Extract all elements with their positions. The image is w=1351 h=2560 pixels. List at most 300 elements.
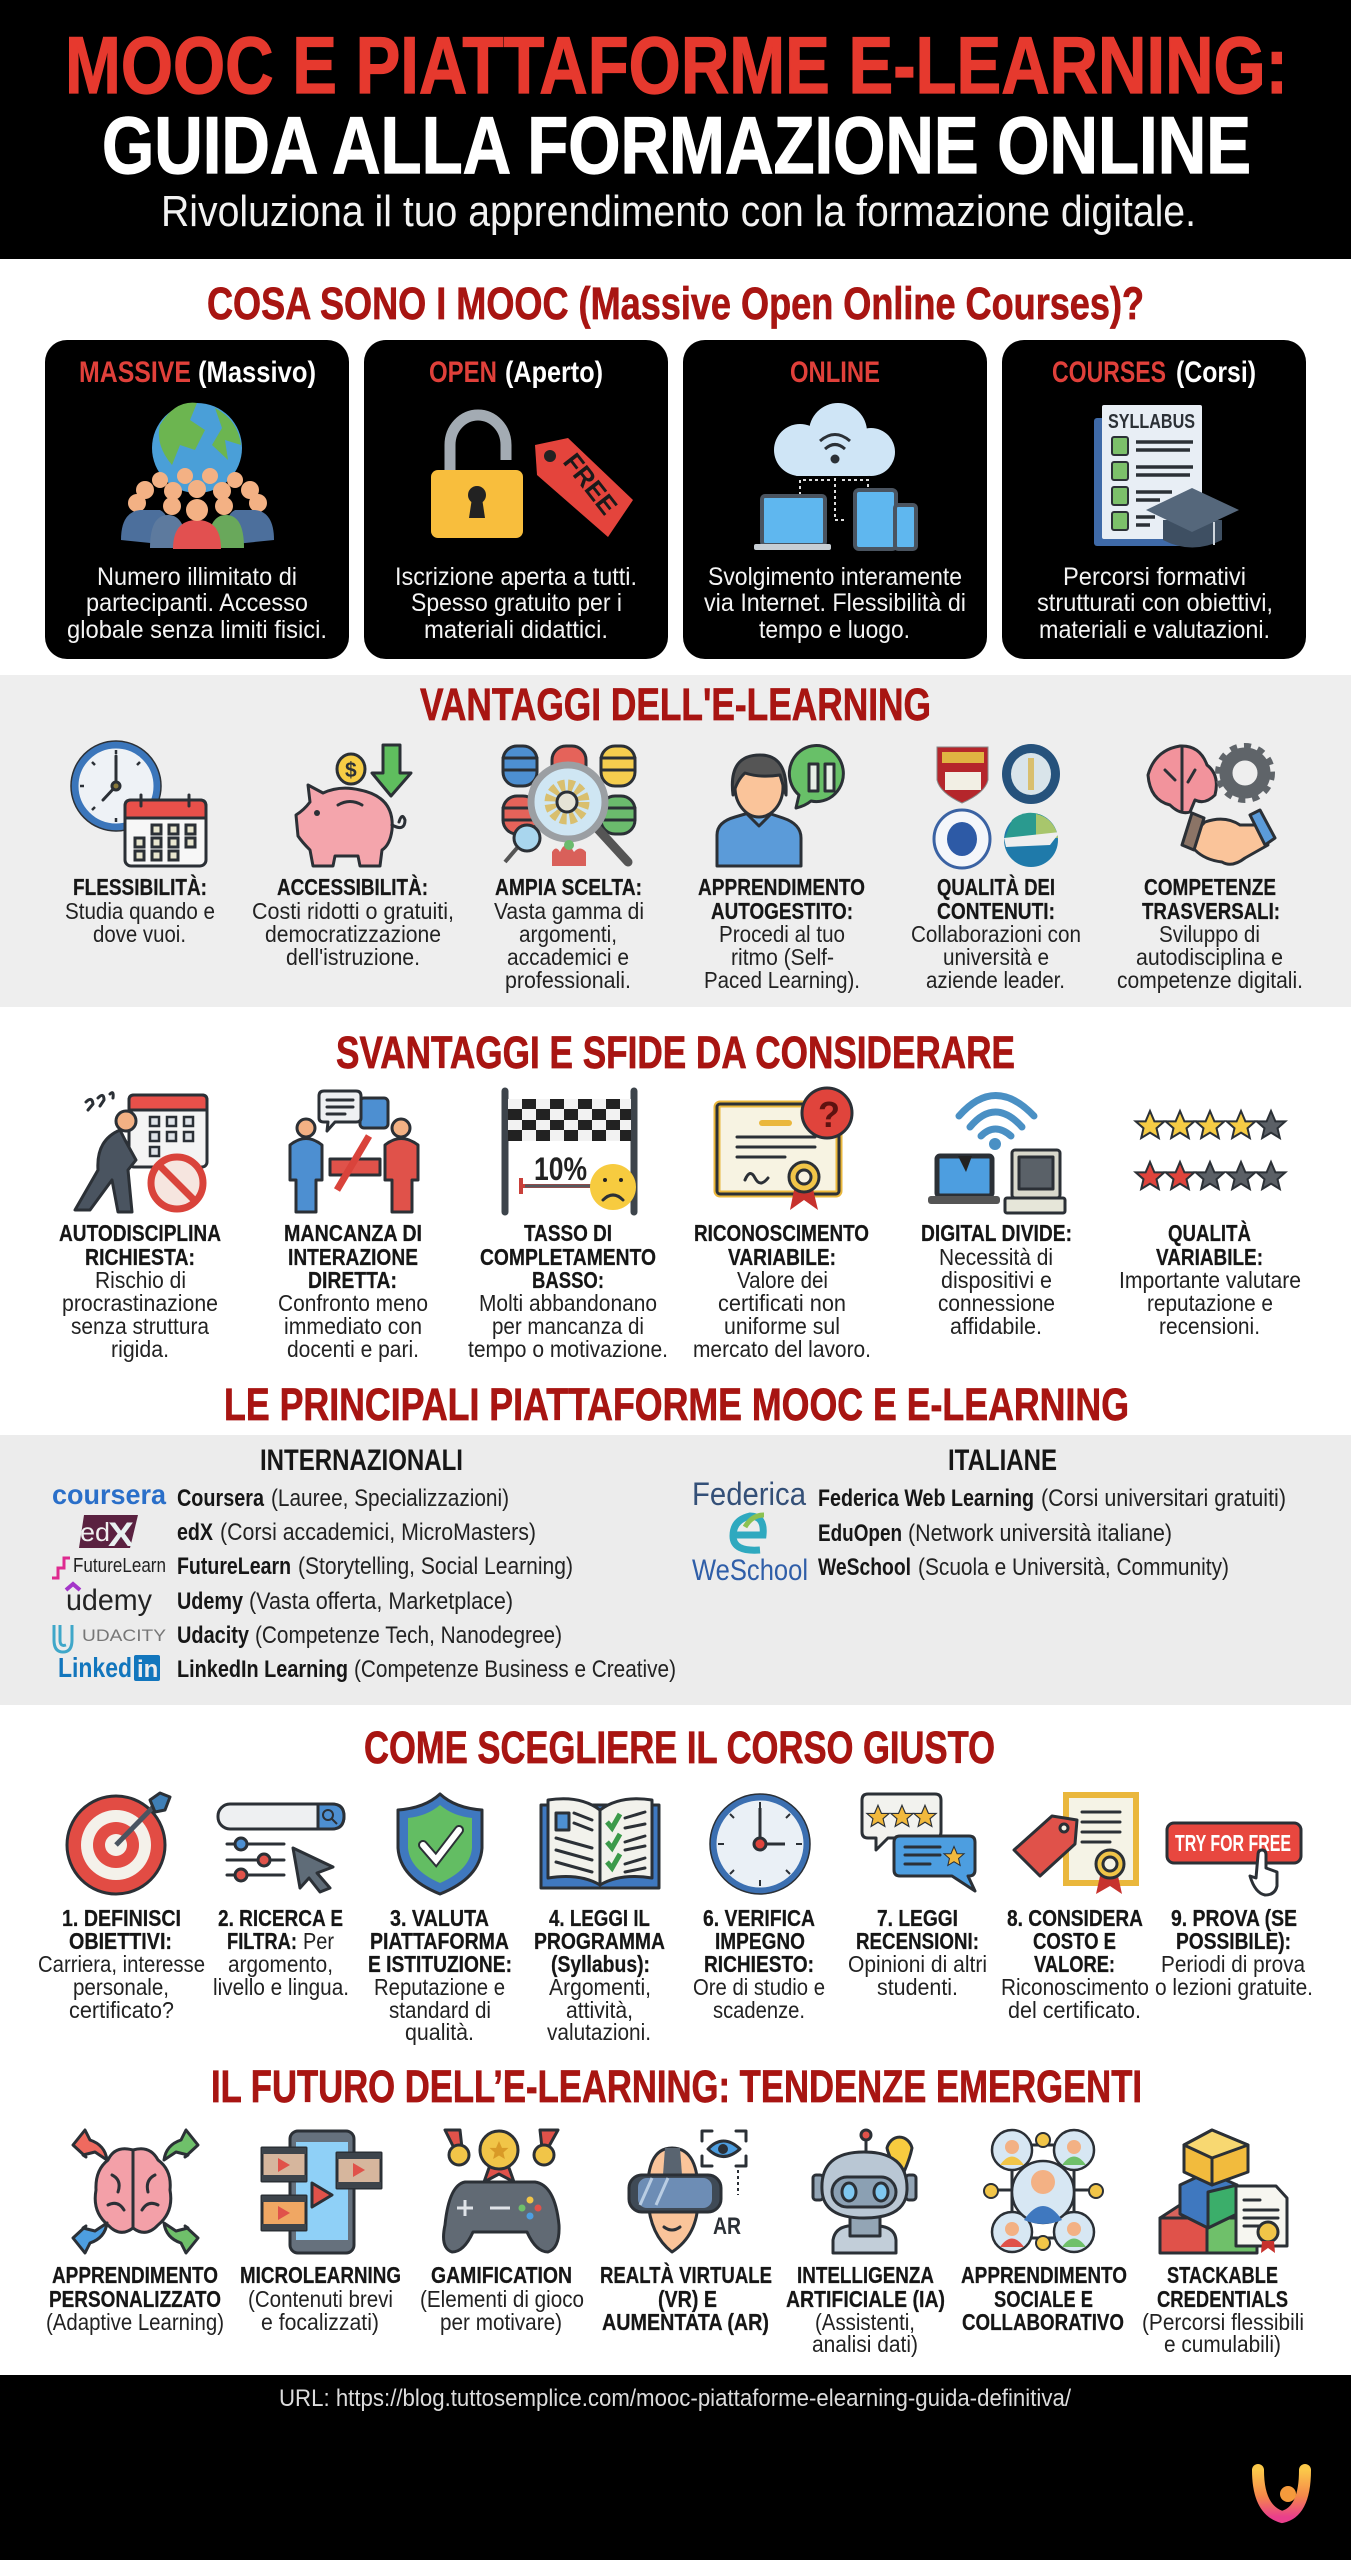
label: studenti. [877, 1974, 958, 2000]
item: personalizzato [46, 2130, 224, 2335]
text [395, 563, 637, 644]
label: MANCANZA DI [284, 1220, 422, 1246]
linkedin: (Competenze Business e Creative) [354, 1656, 676, 1683]
edX [79, 1515, 536, 1554]
label: PERSONALIZZATO [49, 2286, 221, 2312]
icon: stressed person, calendar, prohibition sign [75, 1093, 207, 1212]
udemy: Udemy [177, 1588, 244, 1615]
label: Periodi di prova [1161, 1951, 1305, 1977]
item: accessibilità [252, 745, 454, 970]
icon: broken wifi, laptop, old computer [928, 1096, 1065, 1213]
label [38, 1905, 205, 2023]
icon: shield check [398, 1794, 482, 1894]
icon: robot and lightbulb [813, 2130, 916, 2253]
label: COLLABORATIVO [962, 2309, 1124, 2335]
label: Procedi al tuo [719, 921, 845, 947]
label: STACKABLE [1167, 2262, 1278, 2288]
label: RECENSIONI: [856, 1928, 979, 1954]
icon: search bar and filters [218, 1804, 344, 1892]
item: microlearning [240, 2131, 401, 2335]
label [240, 2262, 401, 2335]
label [911, 873, 1081, 993]
label: APPRENDIMENTO [52, 2262, 218, 2288]
label [698, 874, 865, 993]
label: (Syllabus): [551, 1951, 650, 1977]
label: standard di [389, 1997, 491, 2023]
udemy [66, 1584, 513, 1617]
federica [692, 1476, 1286, 1512]
label: CREDENTIALS [1157, 2286, 1288, 2312]
icon: star ratings [1136, 1111, 1285, 1189]
label: o lezioni gratuite. [1155, 1974, 1313, 2000]
item: gamification [420, 2130, 584, 2335]
label: GAMIFICATION [431, 2262, 572, 2288]
text: Svolgimento interamente [708, 563, 962, 591]
item 8 [1155, 1823, 1313, 2000]
label: 6. VERIFICA [703, 1905, 815, 1931]
icon: people network [984, 2130, 1103, 2252]
panel: vantaggi [0, 675, 1351, 1007]
item: autodisciplina [59, 1093, 221, 1362]
card: open: OPEN [429, 356, 497, 389]
futurelearn: FutureLearn [177, 1553, 291, 1580]
label: PIATTAFORMA [370, 1928, 509, 1954]
subtitle: Rivoluziona il tuo apprendimento con la formazione digitale. [161, 187, 1196, 236]
label: mercato del lavoro. [693, 1336, 871, 1362]
label: scadenze. [713, 1997, 805, 2023]
panel: cosa sono i MOOC [45, 278, 1306, 659]
item 6 [848, 1794, 987, 2000]
label: Riconoscimento [1001, 1974, 1149, 2000]
label [1155, 1905, 1313, 2000]
label: valutazioni. [547, 2019, 651, 2045]
item: qualità dei contenuti [911, 744, 1081, 993]
icon: review bubbles [862, 1794, 975, 1891]
icon: clock [710, 1794, 810, 1894]
card: courses: (Corsi) [1176, 356, 1256, 389]
footer [0, 2375, 1351, 2560]
column: italiane [692, 1444, 1286, 1587]
label: Importante valutare [1119, 1267, 1301, 1293]
edX: (Corsi accademici, MicroMasters) [220, 1519, 536, 1546]
label: Sviluppo di [1159, 921, 1260, 947]
label: APPRENDIMENTO [961, 2262, 1127, 2288]
label: RICONOSCIMENTO [694, 1220, 869, 1246]
coursera [52, 1479, 509, 1512]
label [1119, 1219, 1301, 1339]
label: VALORE: [1034, 1951, 1115, 1977]
label: FLESSIBILITÀ: [73, 873, 207, 900]
edX: ed [80, 1517, 110, 1547]
label [65, 873, 215, 947]
heading: COME SCEGLIERE IL CORSO GIUSTO [364, 1722, 995, 1773]
label: COSTO E [1033, 1928, 1116, 1954]
icon: phone with film strips [262, 2131, 381, 2253]
futurelearn: FutureLearn [73, 1555, 166, 1577]
label: RICHIESTA: [85, 1244, 195, 1270]
icon: clock and calendar [71, 741, 206, 866]
label: COMPETENZE [1144, 874, 1276, 900]
label: (Assistenti, [815, 2309, 915, 2335]
label [848, 1905, 987, 2000]
label: APPRENDIMENTO [698, 874, 865, 900]
label: argomento, [228, 1951, 333, 1977]
item: tasso di completamento [468, 1091, 668, 1362]
column: internazionali [52, 1444, 676, 1683]
label: immediato con [284, 1313, 422, 1339]
label: certificati non [718, 1290, 846, 1316]
card: courses [1002, 340, 1306, 659]
text: tempo e luogo. [759, 616, 910, 644]
label [921, 1220, 1072, 1339]
item 1 [38, 1793, 205, 2023]
label: affidabile. [950, 1313, 1042, 1339]
card: online [683, 340, 987, 659]
udemy: (Vasta offerta, Marketplace) [249, 1588, 513, 1615]
label: (Contenuti brevi [248, 2286, 393, 2312]
label: QUALITÀ DEI [937, 873, 1055, 900]
icon: brain gear handshake [1148, 746, 1275, 864]
coursera: coursera [52, 1479, 166, 1510]
text: Percorsi formativi [1063, 563, 1246, 591]
card: massive: MASSIVE [79, 356, 191, 389]
label: procrastinazione [62, 1290, 218, 1316]
label [600, 2261, 772, 2335]
coursera: Coursera [177, 1485, 265, 1512]
icon: two people with bubbles [290, 1091, 418, 1212]
edX: X [108, 1516, 134, 1554]
heading: LE PRINCIPALI PIATTAFORME MOOC E E-LEARNING [224, 1379, 1129, 1430]
udacity: UDACITY [82, 1626, 166, 1645]
card: open: (Aperto) [505, 356, 603, 389]
label: VARIABILE: [728, 1244, 836, 1270]
label: argomenti, [519, 921, 617, 947]
label: 9. PROVA (SE [1171, 1905, 1297, 1931]
label: 4. LEGGI IL [549, 1905, 650, 1931]
column: internazionali: INTERNAZIONALI [260, 1444, 463, 1477]
linkedin [58, 1652, 676, 1683]
icon: open lock and free tag [431, 415, 633, 538]
item 2 [213, 1804, 349, 2000]
icon: syllabus and graduation cap: SYLLABUS [1108, 411, 1195, 433]
icon: certificate with question mark [717, 1088, 852, 1210]
text [67, 563, 327, 644]
item: apprendimento autogestito [698, 746, 865, 993]
item: stackable [1142, 2130, 1304, 2357]
label [252, 873, 454, 970]
label: Ore di studio e [693, 1974, 825, 2000]
label: ARTIFICIALE (IA) [786, 2286, 945, 2312]
label: ritmo (Self- [731, 944, 834, 970]
label: BASSO: [532, 1267, 604, 1293]
icon: finish line, 10% and sad face: 10% [534, 1151, 587, 1187]
heading: SVANTAGGI E SFIDE DA CONSIDERARE [336, 1027, 1015, 1078]
label: recensioni. [1159, 1313, 1260, 1339]
udacity: Udacity [177, 1622, 250, 1649]
icon: syllabus and graduation cap [1094, 405, 1239, 548]
label: del certificato. [1008, 1997, 1141, 2023]
label: AMPIA SCELTA: [495, 874, 642, 900]
card: massive [45, 340, 349, 659]
icon: globe and crowd [121, 403, 274, 549]
futurelearn: (Storytelling, Social Learning) [298, 1553, 573, 1580]
label [494, 874, 644, 993]
label: ACCESSIBILITÀ: [277, 873, 428, 900]
label: REALTÀ VIRTUALE [600, 2261, 772, 2288]
label: 2. RICERCA E [218, 1905, 343, 1931]
linkedin: in [137, 1656, 158, 1683]
label: (Elementi di gioco [420, 2286, 584, 2312]
label [693, 1220, 871, 1362]
text: Spesso gratuito per i [411, 589, 622, 617]
item: riconoscimento variabile [693, 1088, 871, 1362]
label: Valore dei [737, 1267, 828, 1293]
label: AUTOGESTITO: [711, 898, 853, 924]
panel: futuro [46, 2061, 1304, 2357]
label: RICHIESTO: [704, 1951, 814, 1977]
eduopen: (Network università italiane) [908, 1520, 1172, 1547]
label [786, 2262, 945, 2357]
label: 7. LEGGI [877, 1905, 958, 1931]
label: INTELLIGENZA [797, 2262, 934, 2288]
label: OBIETTIVI: [69, 1928, 172, 1954]
url: URL: https://blog.tuttosemplice.com/mooc-piattaforme-elearning-guida-definitiva/ [279, 2385, 1071, 2412]
label: università e [943, 944, 1049, 970]
item 5 [693, 1794, 825, 2023]
item 7 [1001, 1795, 1149, 2023]
item: flessibilità [65, 741, 215, 947]
icon: stacked blocks and certificate [1160, 2130, 1287, 2253]
label: reputazione e [1147, 1290, 1273, 1316]
label: Reputazione e [374, 1974, 505, 2000]
label: e focalizzati) [261, 2309, 379, 2335]
label: POSSIBILE): [1176, 1928, 1291, 1954]
card: online: ONLINE [790, 356, 880, 389]
icon: certificate with question mark: ? [818, 1094, 840, 1135]
label: VARIABILE: [1156, 1244, 1263, 1270]
panel: piattaforme [0, 1379, 1351, 1705]
linkedin: Linked [58, 1652, 132, 1683]
label: DIRETTA: [308, 1267, 397, 1293]
label [368, 1905, 512, 2045]
label [278, 1220, 428, 1362]
label: e cumulabili) [1164, 2331, 1281, 2357]
icon: try for free button: TRY FOR FREE [1175, 1830, 1291, 1856]
label: PROGRAMMA [534, 1928, 665, 1954]
label: QUALITÀ [1168, 1219, 1251, 1246]
label: senza struttura [71, 1313, 209, 1339]
label: uniforme sul [724, 1313, 840, 1339]
label [1142, 2262, 1304, 2357]
text: globale senza limiti fisici. [67, 616, 327, 644]
icon: VR headset and AR eye [629, 2131, 746, 2252]
icon: magnifier and databases [503, 746, 635, 866]
label: Costi ridotti o gratuiti, [252, 898, 454, 924]
label: (Percorsi flessibili [1142, 2309, 1304, 2335]
label: AUMENTATA (AR) [602, 2309, 769, 2335]
text: partecipanti. Accesso [86, 589, 308, 617]
label: SOCIALE E [994, 2286, 1093, 2312]
label: docenti e pari. [287, 1336, 419, 1362]
heading: COSA SONO I MOOC (Massive Open Online Courses)? [207, 278, 1144, 329]
linkedin: LinkedIn Learning [177, 1656, 348, 1683]
eduopen [733, 1515, 1172, 1550]
label: livello e lingua. [213, 1974, 349, 2000]
coursera: (Lauree, Specializzazioni) [271, 1485, 509, 1512]
label: professionali. [505, 967, 631, 993]
icon: target [67, 1793, 170, 1894]
label: tempo o motivazione. [468, 1336, 668, 1362]
logo [1258, 2470, 1305, 2517]
udacity: (Competenze Tech, Nanodegree) [255, 1622, 562, 1649]
icon: piggy bank [296, 745, 411, 866]
icon: university seals [934, 744, 1060, 868]
item: competenze trasversali [1117, 746, 1303, 993]
label [534, 1905, 665, 2045]
label: dispositivi e [941, 1267, 1052, 1293]
item 4 [534, 1799, 665, 2045]
label: 1. DEFINISCI [62, 1905, 181, 1931]
label: Rischio di [95, 1267, 186, 1293]
text: Iscrizione aperta a tutti. [395, 563, 637, 591]
label [59, 1220, 221, 1362]
label: democratizzazione [265, 921, 441, 947]
label: certificato? [69, 1997, 174, 2023]
text: strutturati con obiettivi, [1037, 589, 1273, 617]
label [46, 2262, 224, 2335]
eduopen: EduOpen [818, 1520, 902, 1547]
label: autodisciplina e [1136, 944, 1283, 970]
label [213, 1905, 349, 2000]
label: (VR) E [658, 2286, 717, 2312]
label: 8. CONSIDERA [1007, 1905, 1143, 1931]
label: personale, [73, 1974, 169, 2000]
icon: finish line, 10% and sad face [505, 1091, 636, 1212]
federica: Federica Web Learning [818, 1485, 1034, 1512]
card: courses: COURSES [1052, 356, 1166, 389]
label: Molti abbandonano [479, 1290, 657, 1316]
text: via Internet. Flessibilità di [704, 589, 966, 617]
label: Argomenti, [549, 1974, 651, 2000]
label: TASSO DI [524, 1220, 612, 1246]
futurelearn [52, 1553, 573, 1580]
label: qualità. [405, 2019, 474, 2045]
federica: (Corsi universitari gratuiti) [1041, 1485, 1286, 1512]
text: Numero illimitato di [97, 563, 297, 591]
label: Carriera, interesse [38, 1951, 205, 1977]
label [1001, 1905, 1149, 2023]
weschool [692, 1554, 1229, 1587]
panel: svantaggi [59, 1027, 1301, 1362]
icon: open book [541, 1799, 659, 1888]
text: materiali didattici. [424, 616, 608, 644]
label: dell'istruzione. [286, 944, 420, 970]
label: E ISTITUZIONE: [368, 1951, 512, 1977]
label: Confronto meno [278, 1290, 428, 1316]
label: FILTRA: [227, 1928, 297, 1954]
card: open [364, 340, 668, 659]
label: Per [303, 1928, 334, 1954]
label: per mancanza di [492, 1313, 644, 1339]
icon: price tag and certificate [1014, 1795, 1136, 1894]
udemy: udemy [66, 1584, 152, 1617]
item: VR AR [600, 2131, 772, 2335]
label: COMPLETAMENTO [480, 1244, 656, 1270]
label: TRASVERSALI: [1142, 898, 1280, 924]
icon: gamepad and medals [444, 2130, 559, 2252]
label: aziende leader. [926, 967, 1065, 993]
item: ampia scelta [494, 746, 644, 993]
label: Collaborazioni con [911, 921, 1081, 947]
label: dove vuoi. [93, 921, 186, 947]
label: IMPEGNO [715, 1928, 805, 1954]
weschool: WeSchool [818, 1554, 911, 1581]
item: qualità variabile [1119, 1111, 1301, 1339]
weschool: (Scuola e Università, Community) [918, 1554, 1229, 1581]
label: 3. VALUTA [390, 1905, 489, 1931]
header [0, 0, 1351, 259]
item: mancanza di interazione [278, 1091, 428, 1362]
label: AUTODISCIPLINA [59, 1220, 221, 1246]
label: INTERAZIONE [288, 1244, 418, 1270]
label: Studia quando e [65, 898, 215, 924]
label [1117, 874, 1303, 993]
item 3 [368, 1794, 512, 2045]
label: DIGITAL DIVIDE: [921, 1220, 1072, 1246]
card: massive: (Massivo) [198, 356, 316, 389]
label: Necessità di [939, 1244, 1053, 1270]
item: digital divide [921, 1096, 1072, 1339]
label [420, 2262, 584, 2335]
label: rigida. [111, 1336, 169, 1362]
icon: person and pause bubble [717, 746, 843, 866]
label: competenze digitali. [1117, 967, 1303, 993]
icon: try for free button [1167, 1823, 1301, 1895]
label: per motivare) [440, 2309, 562, 2335]
text: materiali e valutazioni. [1039, 616, 1270, 644]
item: IA [786, 2130, 945, 2357]
label [693, 1905, 825, 2023]
udacity [54, 1622, 562, 1652]
label: accademici e [507, 944, 629, 970]
label: (Adaptive Learning) [46, 2309, 224, 2335]
federica: Federica [692, 1476, 806, 1512]
weschool: WeSchool [692, 1554, 808, 1587]
edX: edX [177, 1519, 213, 1546]
panel: come scegliere [38, 1722, 1313, 2045]
label: CONTENUTI: [937, 898, 1055, 924]
label: attività, [566, 1997, 633, 2023]
icon: brain with arrows [73, 2130, 198, 2253]
icon: piggy bank: $ [345, 759, 357, 782]
label: MICROLEARNING [240, 2262, 401, 2288]
label: Opinioni di altri [848, 1951, 987, 1977]
icon: cloud and devices [754, 403, 916, 550]
label: connessione [938, 1290, 1055, 1316]
heading: VANTAGGI DELL'E-LEARNING [420, 679, 931, 730]
column: italiane: ITALIANE [948, 1444, 1057, 1477]
text [1037, 563, 1273, 644]
item: sociale [961, 2130, 1127, 2335]
label [961, 2262, 1127, 2335]
icon: open lock and free tag: FREE [557, 447, 624, 520]
label: Paced Learning). [704, 967, 860, 993]
icon: VR headset and AR eye: AR [713, 2213, 741, 2240]
label [468, 1220, 668, 1362]
label: analisi dati) [812, 2331, 918, 2357]
label: Vasta gamma di [494, 898, 644, 924]
text [704, 563, 966, 644]
